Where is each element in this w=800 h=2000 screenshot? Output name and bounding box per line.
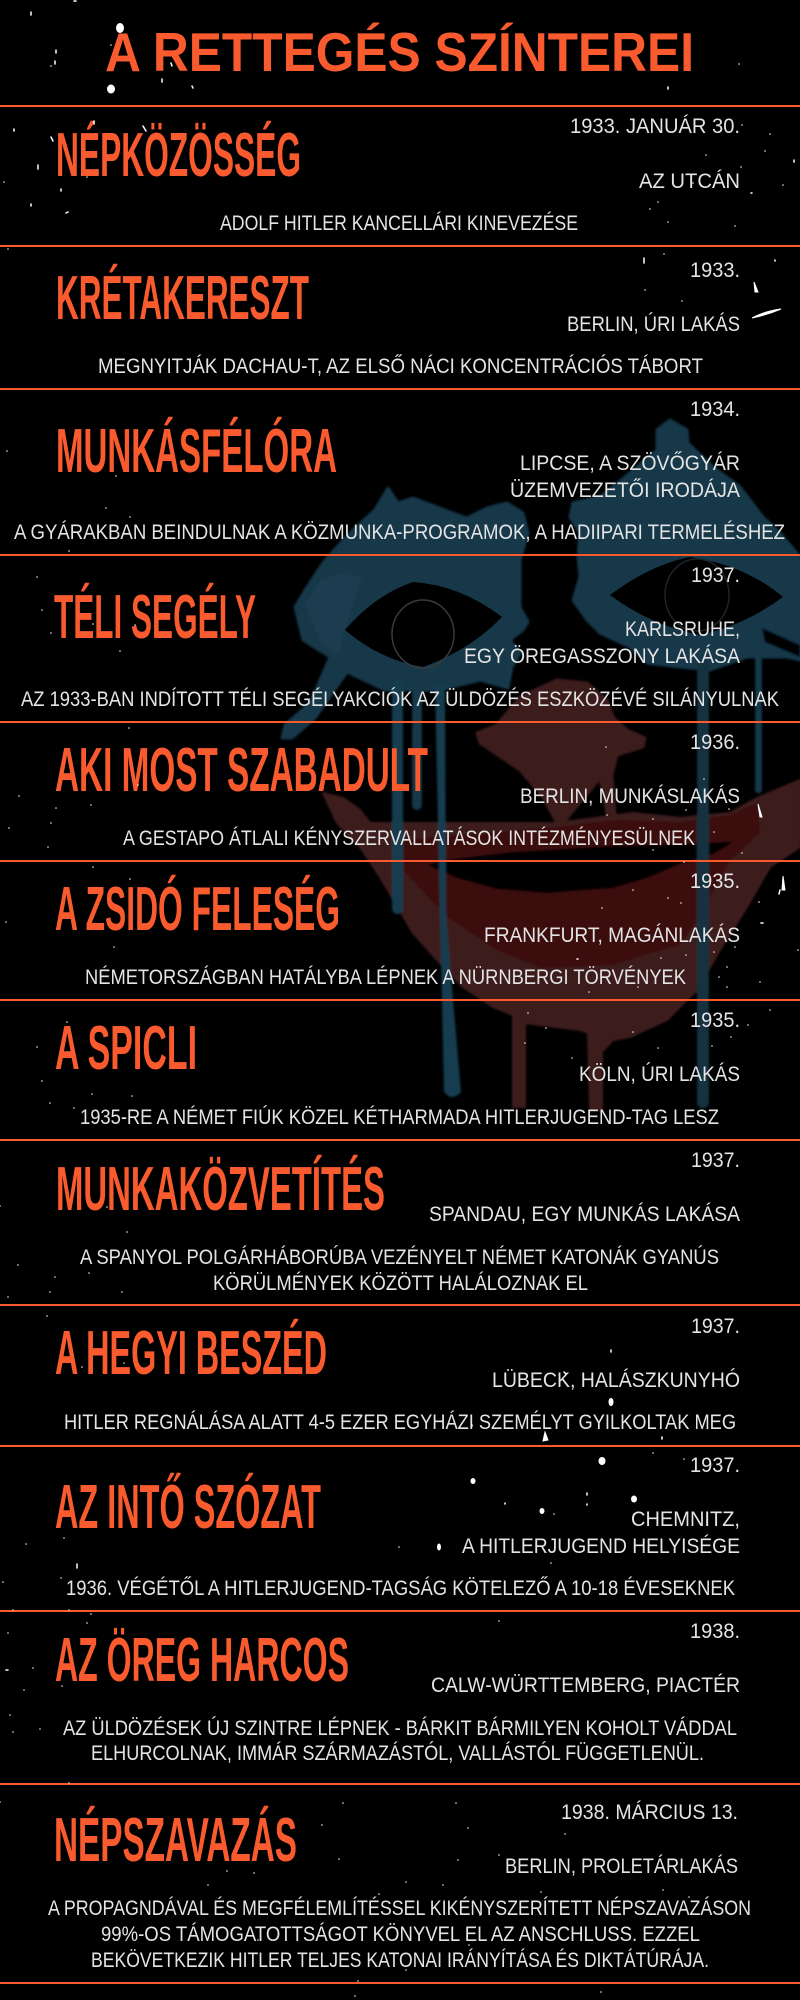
black mouth opening xyxy=(430,843,730,892)
section: A spicli xyxy=(55,1009,740,1129)
right eye xyxy=(610,557,783,635)
place: EGY ÖREGASSZONY LAKÁSA xyxy=(464,645,740,668)
section: Népszavazás xyxy=(48,1801,751,1972)
heading: NÉPSZAVAZÁS xyxy=(54,1806,297,1875)
red mouth xyxy=(323,780,800,1110)
place: BERLIN, PROLETÁRLAKÁS xyxy=(505,1855,738,1878)
place: AZ UTCÁN xyxy=(639,170,740,193)
section: Krétakereszt xyxy=(56,259,740,378)
date: 1938. xyxy=(690,1620,740,1643)
date: 1937. xyxy=(691,1149,740,1172)
dark red lips xyxy=(403,803,760,968)
place: ÜZEMVEZETŐI IRODÁJA xyxy=(510,479,740,502)
section: Téli segély xyxy=(21,564,779,711)
date: 1936. xyxy=(690,731,740,754)
date: 1937. xyxy=(691,1315,740,1338)
description xyxy=(80,1246,719,1295)
heading: AZ INTŐ SZÓZAT xyxy=(55,1473,321,1542)
date: 1935. xyxy=(690,870,740,893)
date: 1933. JANUÁR 30. xyxy=(570,115,740,138)
blue left blob with drips xyxy=(282,488,528,738)
date: 1938. MÁRCIUS 13. xyxy=(561,1801,738,1824)
place xyxy=(510,452,740,502)
left iris xyxy=(392,600,454,668)
description: A SPANYOL POLGÁRHÁBORÚBA VEZÉNYELT NÉMET KATONÁK GYANÚS xyxy=(80,1246,719,1269)
date: 1934. xyxy=(690,398,740,421)
description: 99%-OS TÁMOGATOTTSÁGOT KÖNYVEL EL AZ ANSCHLUSS. EZZEL xyxy=(101,1923,700,1946)
section: Az intő szózat xyxy=(55,1454,740,1600)
blue right blob with drips xyxy=(570,420,800,670)
section: A zsidó feleség xyxy=(55,870,740,989)
section: Aki most szabadult xyxy=(55,731,740,850)
heading: KRÉTAKERESZT xyxy=(56,264,309,333)
heading: MUNKAKÖZVETÍTÉS xyxy=(56,1155,385,1224)
description xyxy=(63,1717,737,1765)
heading: AKI MOST SZABADULT xyxy=(55,736,428,805)
section: Népközösség xyxy=(56,115,740,235)
place: KÖLN, ÚRI LAKÁS xyxy=(579,1063,740,1086)
section: A hegyi beszéd xyxy=(55,1315,740,1434)
date: 1935. xyxy=(690,1009,740,1032)
heading: AZ ÖREG HARCOS xyxy=(55,1626,349,1695)
date: 1933. xyxy=(690,259,740,282)
date: 1937. xyxy=(690,1454,740,1477)
heading: TÉLI SEGÉLY xyxy=(54,583,256,652)
description: MEGNYITJÁK DACHAU-T, AZ ELSŐ NÁCI KONCENTRÁCIÓS TÁBORT xyxy=(98,355,703,378)
heading: MUNKÁSFÉLÓRA xyxy=(56,417,337,486)
heading: NÉPKÖZÖSSÉG xyxy=(56,121,301,190)
place: A HITLERJUGEND HELYISÉGE xyxy=(462,1535,740,1558)
place xyxy=(462,1508,740,1558)
section: Munkaközvetítés xyxy=(56,1149,740,1295)
description: NÉMETORSZÁGBAN HATÁLYBA LÉPNEK A NÜRNBERGI TÖRVÉNYEK xyxy=(85,966,686,989)
place: LIPCSE, A SZÖVŐGYÁR xyxy=(520,452,740,475)
section: Munkásfélóra xyxy=(14,398,785,544)
description: KÖRÜLMÉNYEK KÖZÖTT HALÁLOZNAK EL xyxy=(213,1272,588,1295)
place: KARLSRUHE, xyxy=(625,618,740,641)
date: 1937. xyxy=(691,564,740,587)
title: A RETTEGÉS SZÍNTEREI xyxy=(105,21,694,83)
left eye xyxy=(345,582,502,667)
red nose xyxy=(477,680,645,823)
description: A GESTAPO ÁTLALI KÉNYSZERVALLATÁSOK INTÉZMÉNYESÜLNEK xyxy=(123,827,695,850)
heading: A HEGYI BESZÉD xyxy=(55,1319,327,1388)
place: BERLIN, ÚRI LAKÁS xyxy=(567,313,740,336)
heading: A SPICLI xyxy=(55,1014,197,1083)
description: ADOLF HITLER KANCELLÁRI KINEVEZÉSE xyxy=(220,212,578,235)
section: Az öreg harcos xyxy=(55,1620,740,1765)
place: BERLIN, MUNKÁSLAKÁS xyxy=(520,785,740,808)
description xyxy=(48,1897,751,1972)
place: SPANDAU, EGY MUNKÁS LAKÁSA xyxy=(429,1203,740,1226)
place: CHEMNITZ, xyxy=(631,1508,740,1531)
place: CALW-WÜRTTEMBERG, PIACTÉR xyxy=(431,1674,740,1697)
place: FRANKFURT, MAGÁNLAKÁS xyxy=(484,924,740,947)
description: ELHURCOLNAK, IMMÁR SZÁRMAZÁSTÓL, VALLÁSTÓL FÜGGETLENÜL. xyxy=(91,1742,704,1765)
description: 1935-RE A NÉMET FIÚK KÖZEL KÉTHARMADA HITLERJUGEND-TAG LESZ xyxy=(80,1106,719,1129)
heading: A ZSIDÓ FELESÉG xyxy=(55,875,340,944)
right iris xyxy=(665,559,729,631)
place xyxy=(464,618,740,668)
illustration: crying face in the background xyxy=(282,420,800,1110)
place: LÜBECK, HALÁSZKUNYHÓ xyxy=(492,1369,740,1392)
